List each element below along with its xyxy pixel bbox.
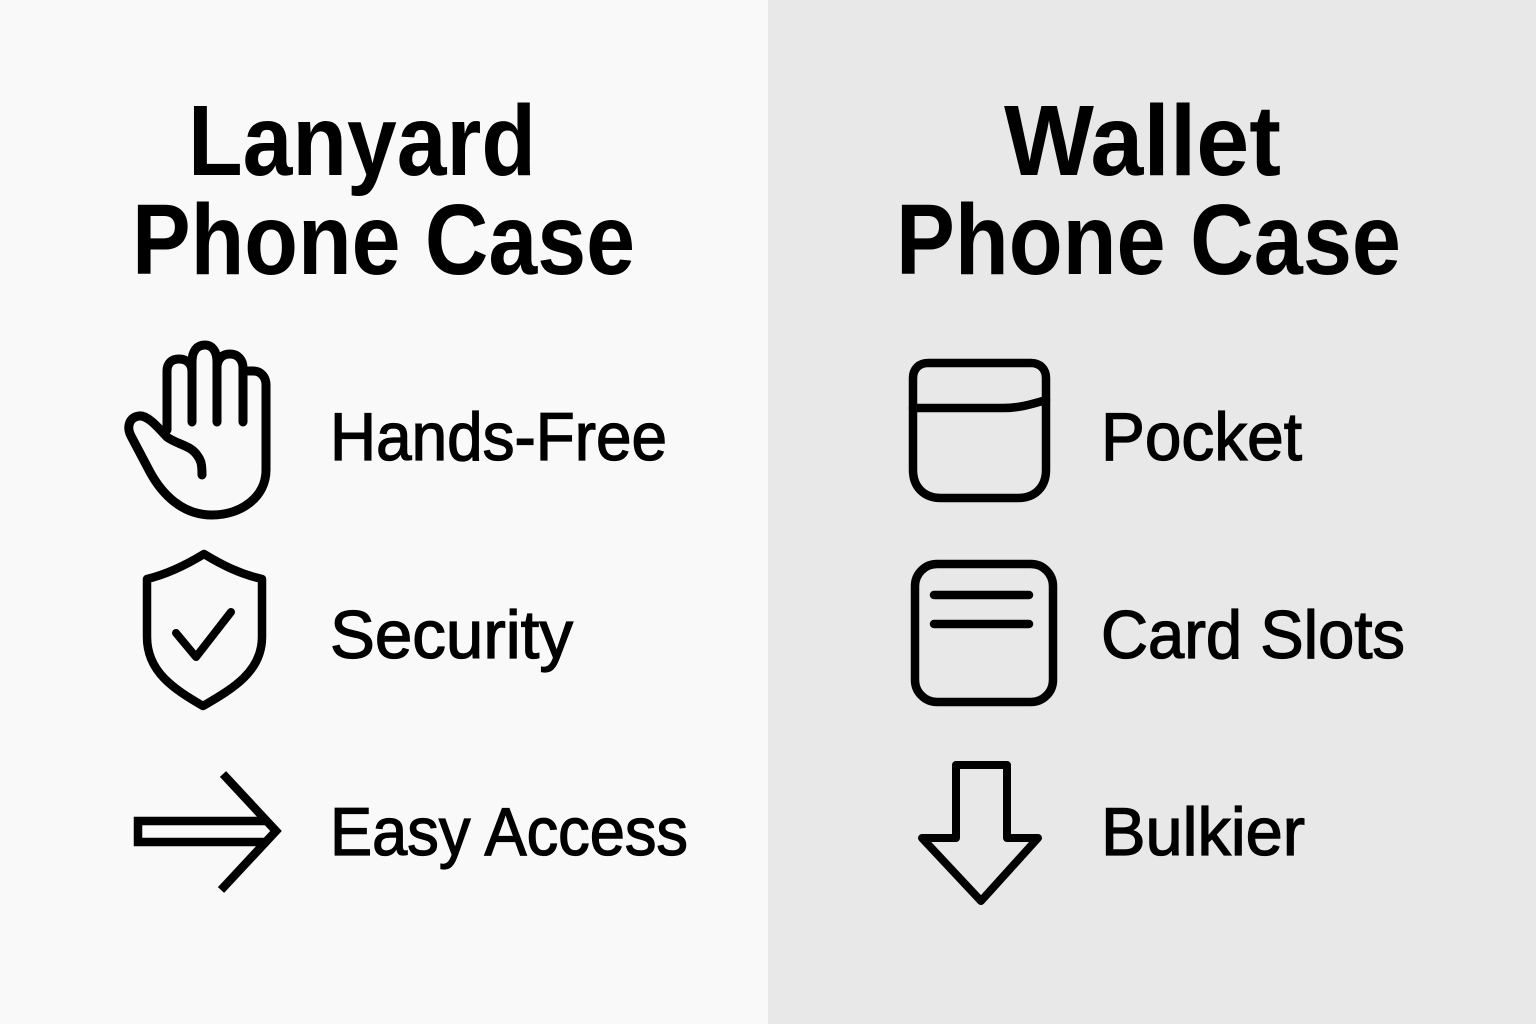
heading: wallet phone case <box>896 85 1401 296</box>
panel: lanyard phone case <box>0 0 768 1024</box>
label: card slots: Card Slots <box>1101 597 1405 673</box>
icon: right arrow <box>138 774 276 890</box>
label: pocket: Pocket <box>1101 399 1302 475</box>
icon: pocket <box>913 363 1046 498</box>
heading: wallet phone case: Phone Case <box>896 184 1401 296</box>
icon: down arrow <box>922 765 1038 901</box>
label: easy access: Easy Access <box>330 794 688 870</box>
icon: security shield <box>147 554 262 706</box>
label: bulkier: Bulkier <box>1101 794 1305 870</box>
icon: raised hand <box>129 345 266 515</box>
label: hands-free: Hands-Free <box>330 399 667 475</box>
heading: lanyard phone case <box>132 85 635 296</box>
heading: wallet phone case: Wallet <box>1004 85 1281 197</box>
label: security: Security <box>330 597 573 673</box>
heading: lanyard phone case: Lanyard <box>188 85 536 197</box>
icon: card slots <box>915 564 1053 702</box>
heading: lanyard phone case: Phone Case <box>132 184 635 296</box>
panel: wallet phone case <box>768 0 1536 1024</box>
